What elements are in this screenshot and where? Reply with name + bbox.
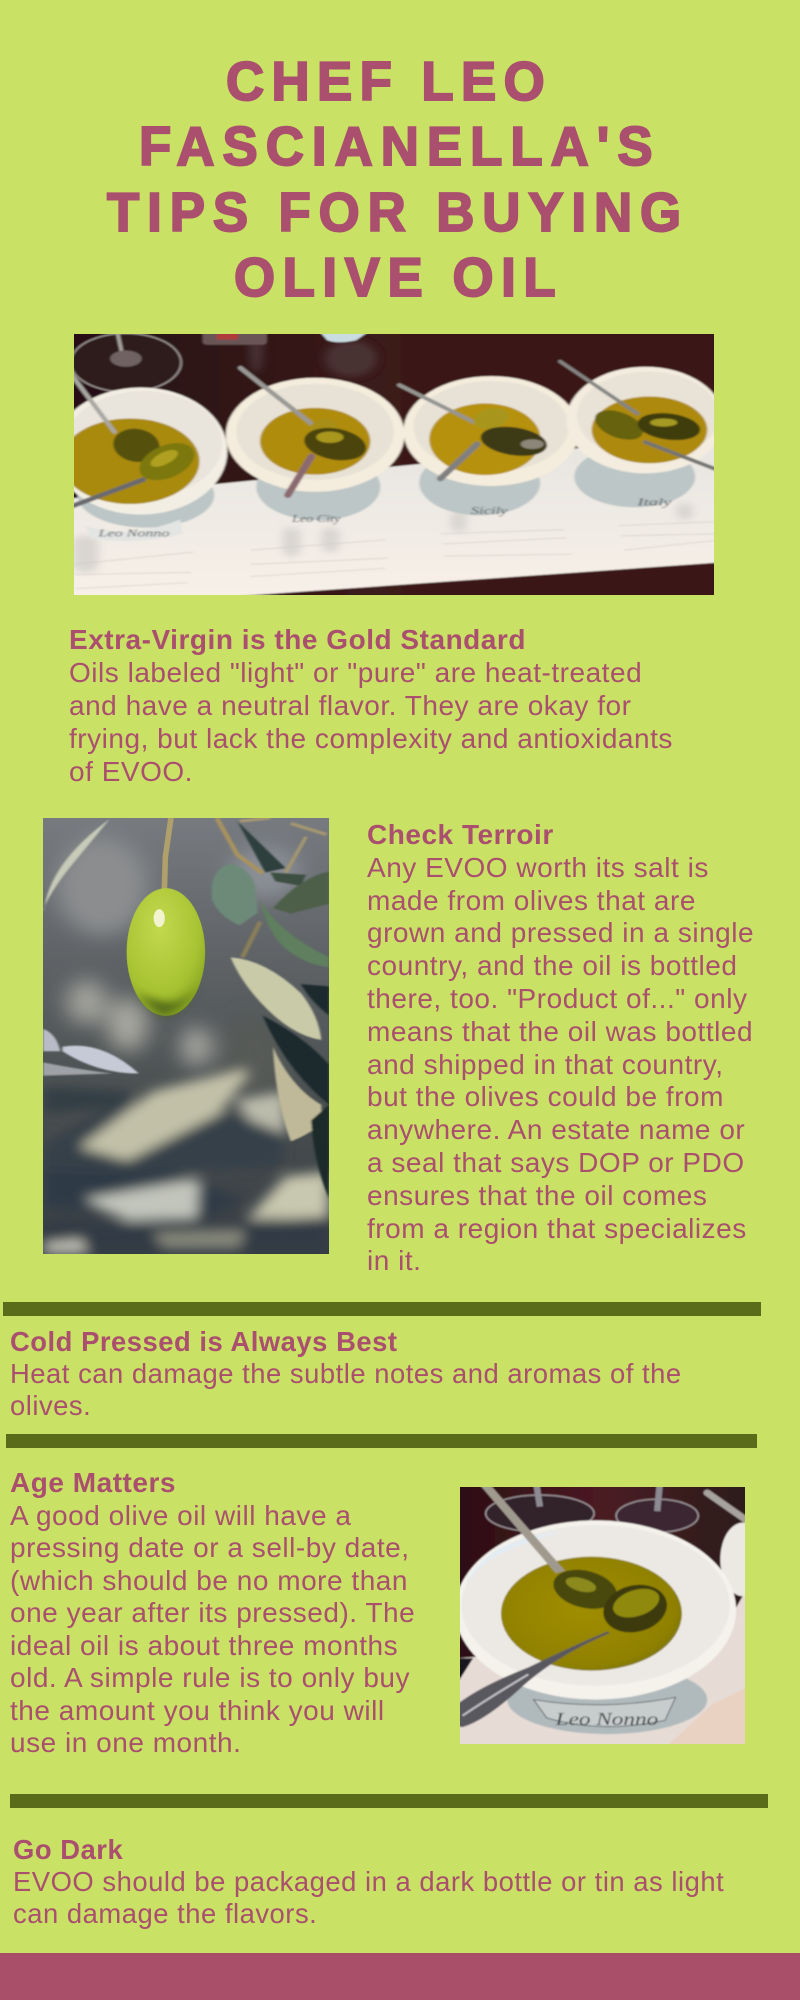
- bowl: [455, 1520, 736, 1700]
- body copy: of EVOO.: [69, 756, 193, 787]
- photo contents: [54, 330, 724, 599]
- handwritten bowl labels: [85, 496, 672, 541]
- heading: Age Matters: [10, 1467, 176, 1498]
- body copy: anywhere. An estate name or: [367, 1114, 745, 1145]
- body copy: and have a neutral flavor. They are okay for: [69, 690, 631, 721]
- handwritten bowl labels: Sicily: [471, 504, 508, 516]
- heading: Extra-Virgin is the Gold Standard: [69, 624, 526, 655]
- text block: Cold Pressed: [10, 1326, 682, 1421]
- body copy: Heat can damage the subtle notes and aromas of the: [10, 1358, 682, 1389]
- body copy: one year after its pressed). The: [10, 1597, 415, 1628]
- title: OLIVE OIL: [234, 247, 556, 308]
- spoons: [67, 361, 721, 508]
- bowl 2: [226, 378, 405, 492]
- body copy: can damage the flavors.: [13, 1898, 317, 1929]
- blurred background foliage: [56, 837, 301, 1096]
- heading: Check Terroir: [367, 819, 554, 850]
- photo: single bowl of olive oil: [460, 1487, 745, 1744]
- spoons: [456, 1483, 675, 1727]
- plate and label: Leo Nonno: [554, 1710, 658, 1730]
- body copy: pressing date or a sell-by date,: [10, 1532, 410, 1563]
- title: FASCIANELLA'S: [139, 116, 653, 177]
- text block: Extra-Virgin: [69, 624, 673, 787]
- body copy: EVOO should be packaged in a dark bottle or tin as light: [13, 1866, 724, 1897]
- photo: green olive on branch: [43, 818, 329, 1254]
- body copy: frying, but lack the complexity and antioxidants: [69, 723, 673, 754]
- spoon heads: [106, 404, 703, 488]
- title: [106, 51, 681, 308]
- table reflections: [249, 332, 377, 377]
- wine glasses: [486, 1483, 747, 1532]
- top objects and wine glass: [71, 330, 371, 392]
- heading: Cold Pressed is Always Best: [10, 1326, 398, 1357]
- body copy: old. A simple rule is to only buy: [10, 1662, 410, 1693]
- branch stem: [164, 818, 171, 890]
- body copy: a seal that says DOP or PDO: [367, 1147, 745, 1178]
- olive: [127, 888, 205, 1016]
- title: CHEF LEO: [226, 51, 545, 112]
- neighbouring bowl: [720, 1523, 766, 1596]
- paper: [456, 1585, 749, 1748]
- body copy: olives.: [10, 1390, 91, 1421]
- body copy: Any EVOO worth its salt is: [367, 852, 709, 883]
- body copy: the amount you think you will: [10, 1694, 385, 1726]
- handwritten bowl labels: Leo Nonno: [97, 527, 170, 539]
- body copy: [13, 1866, 724, 1929]
- body copy: made from olives that are: [367, 885, 696, 916]
- sharp leaves at right: [212, 818, 329, 1199]
- body copy: [10, 1358, 682, 1421]
- plate and label: [507, 1665, 707, 1734]
- body copy: Oils labeled "light" or "pure" are heat-treated: [69, 657, 642, 688]
- text block: Age Matters: [10, 1467, 415, 1758]
- body copy: means that the oil was bottled: [367, 1016, 753, 1047]
- body copy: in it.: [367, 1245, 421, 1276]
- divider bar 1: [3, 1302, 761, 1316]
- body copy: [69, 657, 673, 787]
- handwritten bowl labels: Italy: [636, 496, 672, 508]
- handwritten bowl labels: Leo City: [291, 512, 341, 525]
- body copy: country, and the oil is bottled: [367, 950, 737, 981]
- body copy: A good olive oil will have a: [10, 1500, 351, 1530]
- photo contents: [455, 1483, 766, 1748]
- body copy: ideal oil is about three months: [10, 1630, 398, 1660]
- photo: four bowls of olive oil with spoons: [74, 334, 714, 595]
- body copy: [367, 852, 754, 1276]
- body copy: [10, 1500, 415, 1758]
- divider bar 2: [6, 1434, 757, 1448]
- text block: Go Dark: [13, 1834, 724, 1929]
- body copy: from a region that specializes: [367, 1213, 747, 1244]
- text block: Check Terroir: [367, 819, 754, 1276]
- bowl 4: [566, 367, 724, 473]
- body copy: there, too. "Product of..." only: [367, 983, 748, 1014]
- bowl 1: [54, 388, 227, 515]
- bowl 3: [403, 376, 579, 486]
- body copy: but the olives could be from: [367, 1081, 724, 1112]
- body copy: use in one month.: [10, 1727, 241, 1758]
- title: TIPS FOR BUYING: [107, 182, 681, 243]
- heading: Go Dark: [13, 1834, 123, 1865]
- body copy: ensures that the oil comes: [367, 1180, 707, 1211]
- mid-left leaf: [43, 819, 139, 1076]
- body copy: (which should be no more than: [10, 1564, 408, 1596]
- body copy: and shipped in that country,: [367, 1049, 724, 1080]
- divider bar 3: [10, 1794, 768, 1808]
- paper placemat: [64, 434, 724, 599]
- body copy: grown and pressed in a single: [367, 917, 754, 948]
- footer band: [0, 1953, 800, 2000]
- plates under bowls: [78, 446, 695, 528]
